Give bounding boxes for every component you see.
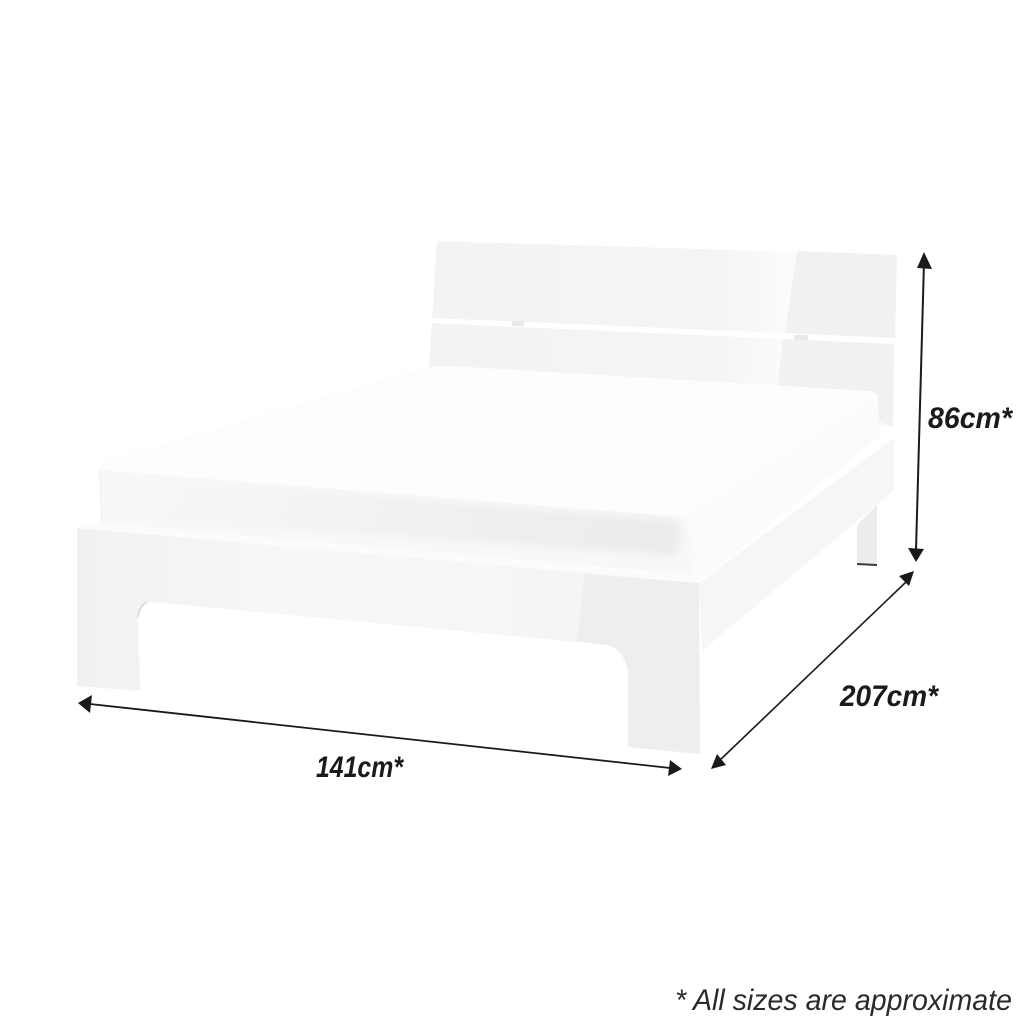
- footnote: * All sizes are approximate: [675, 984, 1012, 1017]
- arrow: height: [908, 252, 932, 562]
- label: depth: 207cm*: [839, 680, 939, 713]
- side rail: [699, 438, 894, 651]
- headboard brackets: [512, 321, 808, 340]
- arrow: width: [78, 695, 682, 776]
- mattress front shade: [106, 474, 681, 556]
- label: height: 86cm*: [928, 402, 1013, 435]
- bed: [77, 241, 897, 754]
- frame top ledge: [77, 522, 699, 583]
- left leg inner edge shadow: [138, 602, 147, 617]
- headboard upper panel: [432, 241, 897, 338]
- mattress top: [100, 366, 878, 517]
- mattress front base: [100, 468, 696, 575]
- headboard lower panel: [429, 323, 894, 427]
- foot board reflection: [577, 574, 700, 754]
- foot board: [77, 528, 700, 754]
- mattress: [100, 366, 881, 580]
- headboard: [429, 241, 897, 427]
- mattress side: [680, 393, 881, 580]
- mattress left outline: [100, 470, 102, 523]
- label: width: 141cm*: [316, 751, 404, 784]
- back leg: [857, 505, 877, 566]
- arrow: depth: [711, 571, 914, 769]
